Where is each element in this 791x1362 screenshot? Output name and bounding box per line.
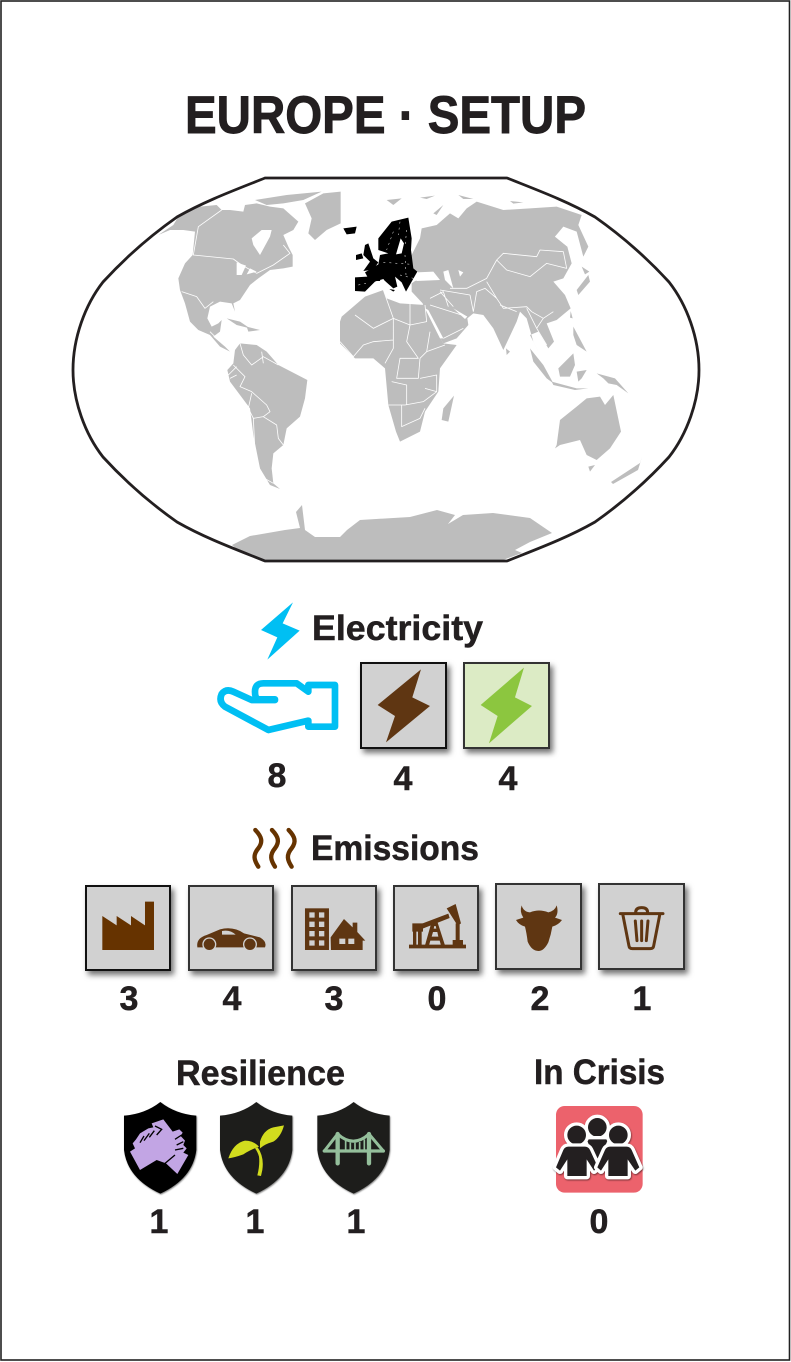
card: industry [86, 886, 170, 970]
map: New Zealand and Antarctica [232, 457, 642, 560]
value: handshake shield: 1 [150, 1203, 168, 1241]
value: supply: 8 [268, 757, 286, 795]
map: Americas borders [182, 210, 290, 483]
map: Americas [158, 192, 341, 489]
value: industry: 3 [120, 980, 138, 1018]
map: Europe highlight [343, 218, 417, 292]
card: green electricity [464, 663, 549, 748]
value: bridge shield: 1 [347, 1203, 365, 1241]
icon: people in crisis [556, 1106, 643, 1193]
map outline [73, 178, 699, 561]
title: EUROPE · SETUP [185, 86, 586, 145]
card: oil and gas [394, 886, 478, 970]
value: waste: 1 [633, 980, 651, 1018]
icon: heat waves [255, 830, 295, 867]
icon: handshake shield [124, 1102, 196, 1194]
card: buildings [292, 886, 376, 970]
card: transport [189, 886, 273, 970]
electricity section [221, 602, 549, 798]
in crisis section [534, 1053, 665, 1241]
value: transport: 4 [223, 980, 242, 1018]
value: fossil electricity: 4 [394, 760, 413, 798]
value: green electricity: 4 [499, 760, 518, 798]
value: in crisis: 0 [590, 1203, 608, 1241]
card: fossil electricity [361, 663, 446, 748]
icon: sprout shield [220, 1102, 292, 1194]
heading: emissions: Emissions [311, 829, 479, 868]
value: livestock: 2 [531, 980, 549, 1018]
emissions section [86, 829, 684, 1018]
value: buildings: 3 [325, 980, 343, 1018]
card: waste [599, 884, 684, 969]
value: sprout shield: 1 [246, 1203, 264, 1241]
world map [73, 178, 699, 561]
heading: electricity: Electricity [312, 609, 484, 648]
icon: hand [221, 683, 335, 730]
value: oil and gas: 0 [428, 980, 446, 1018]
icon: bridge shield [317, 1102, 390, 1194]
map: Africa and Asia borders [340, 290, 445, 427]
heading: in crisis: In Crisis [534, 1053, 665, 1092]
resilience section [124, 1054, 390, 1241]
heading: resilience: Resilience [176, 1054, 345, 1093]
icon: cyan bolt [261, 602, 300, 660]
map: Africa, Asia, Oceania [340, 195, 628, 472]
card: livestock [496, 884, 581, 969]
